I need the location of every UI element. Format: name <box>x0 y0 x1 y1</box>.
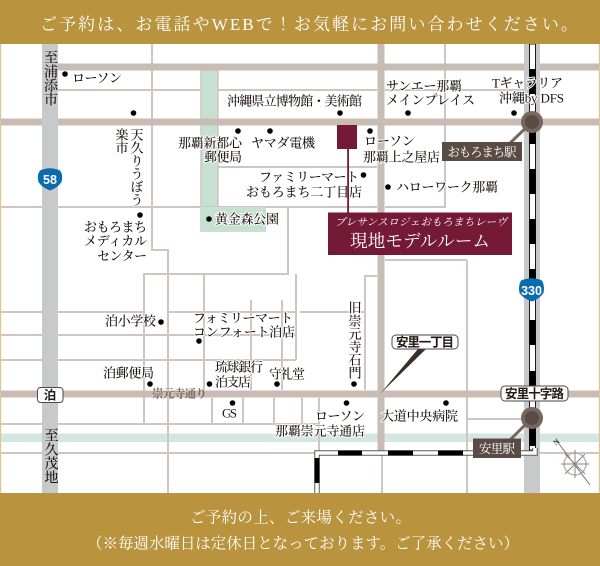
intersection label: 泊 <box>38 388 63 402</box>
labels: upper map places: ヤマダ電機 <box>251 136 316 150</box>
labels: lower map places: GS <box>222 406 237 420</box>
labels: upper map places: メインプレイス <box>386 92 475 108</box>
railway: monorail horizontal <box>317 448 535 493</box>
label: 至浦添市: 至浦添市 <box>42 50 58 106</box>
model room label: 現地モデルルーム <box>350 231 490 251</box>
labels: lower map places: フォミリーマート <box>193 310 293 326</box>
park: green corridor <box>200 70 266 232</box>
labels: lower map places: 泊支店 <box>215 374 251 390</box>
labels: upper map places: 沖縄by DFS <box>499 90 564 106</box>
labels: lower map places: 那覇崇元寺通店 <box>275 424 365 438</box>
labels: upper map places: 那覇新都心 <box>178 136 243 150</box>
label: 至久茂地: 至久茂地 <box>42 428 58 484</box>
badge: route 330: 330 <box>521 284 542 298</box>
labels: upper map places: ハローワーク那覇 <box>396 180 498 194</box>
labels: upper map places: ローソン <box>72 70 122 86</box>
station: おもろまち <box>442 111 543 161</box>
labels: lower map places: 琉球銀行 <box>215 360 263 374</box>
labels: lower map places: 旧崇元寺石門 <box>346 301 362 379</box>
labels: upper map places: 天久りうぼう <box>128 128 144 206</box>
intersection label: 泊: 泊 <box>44 388 56 402</box>
station: おもろまち: おもろまち駅 <box>448 146 517 160</box>
footer banner <box>0 493 600 566</box>
compass: N <box>551 437 562 447</box>
labels: upper map places <box>72 70 564 264</box>
labels: upper map places: センター <box>97 248 147 264</box>
model room label <box>328 212 512 255</box>
labels: lower map places <box>103 301 458 438</box>
labels: upper map places: サンエー那覇 <box>386 78 462 94</box>
station: 安里: 安里駅 <box>479 441 515 456</box>
model room label: プレサンスロジェおもろまちレーヴ <box>335 216 510 228</box>
labels: lower map places: コンフォート泊店 <box>193 324 295 340</box>
intersection label: 安里十字路: 安里十字路 <box>505 386 564 401</box>
labels: upper map places: 那覇上之屋店 <box>363 150 440 164</box>
labels: upper map places: おもろまち二丁目店 <box>246 184 362 200</box>
street name: 崇元寺通り: 崇元寺通り <box>152 386 207 400</box>
header banner <box>0 0 600 44</box>
labels: upper map places: Tギャラリア <box>492 76 563 90</box>
labels: lower map places: 泊郵便局 <box>103 366 154 380</box>
labels: upper map places: ローソン <box>364 134 415 148</box>
map side borders <box>0 44 600 493</box>
map: thin side streets <box>0 44 600 493</box>
railway: monorail vertical <box>530 44 536 450</box>
labels: lower map places: ローソン <box>315 408 365 424</box>
labels: upper map places: 沖縄県立博物館・美術館 <box>227 94 362 108</box>
compass <box>551 437 590 485</box>
labels: upper map places: 郵便局 <box>204 150 242 164</box>
place markers <box>62 71 517 406</box>
road: route 58 <box>42 44 58 493</box>
station: 安里 <box>473 407 543 458</box>
labels: upper map places: メディカル <box>84 234 147 248</box>
labels: upper map places: 楽市 <box>114 127 128 154</box>
labels: upper map places: 黄金森公園 <box>215 212 279 226</box>
labels: upper map places: ファミリーマート <box>259 170 359 184</box>
badge: route 58: 58 <box>43 173 57 187</box>
badge: route 58 <box>38 168 62 190</box>
model room marker <box>337 125 357 213</box>
footer banner: （※毎週水曜日は定休日となっております。ご了承ください） <box>87 534 519 552</box>
intersection label: 安里一丁目 <box>380 334 458 394</box>
labels: upper map places: おもろまち <box>84 220 147 234</box>
map: main streets <box>0 44 600 453</box>
intersection label: 安里一丁目: 安里一丁目 <box>396 334 454 350</box>
labels: lower map places: 守礼堂 <box>269 366 305 382</box>
badge: route 330 <box>519 278 544 302</box>
footer banner: ご予約の上、ご来場ください。 <box>190 508 411 526</box>
labels: lower map places: 大道中央病院 <box>381 408 458 424</box>
road: route 330 <box>524 44 540 493</box>
labels: lower map places: 泊小学校 <box>105 314 157 328</box>
header banner: ご予約は、お電話やWEBで！お気軽にお問い合わせください。 <box>40 15 578 34</box>
river <box>0 434 600 442</box>
